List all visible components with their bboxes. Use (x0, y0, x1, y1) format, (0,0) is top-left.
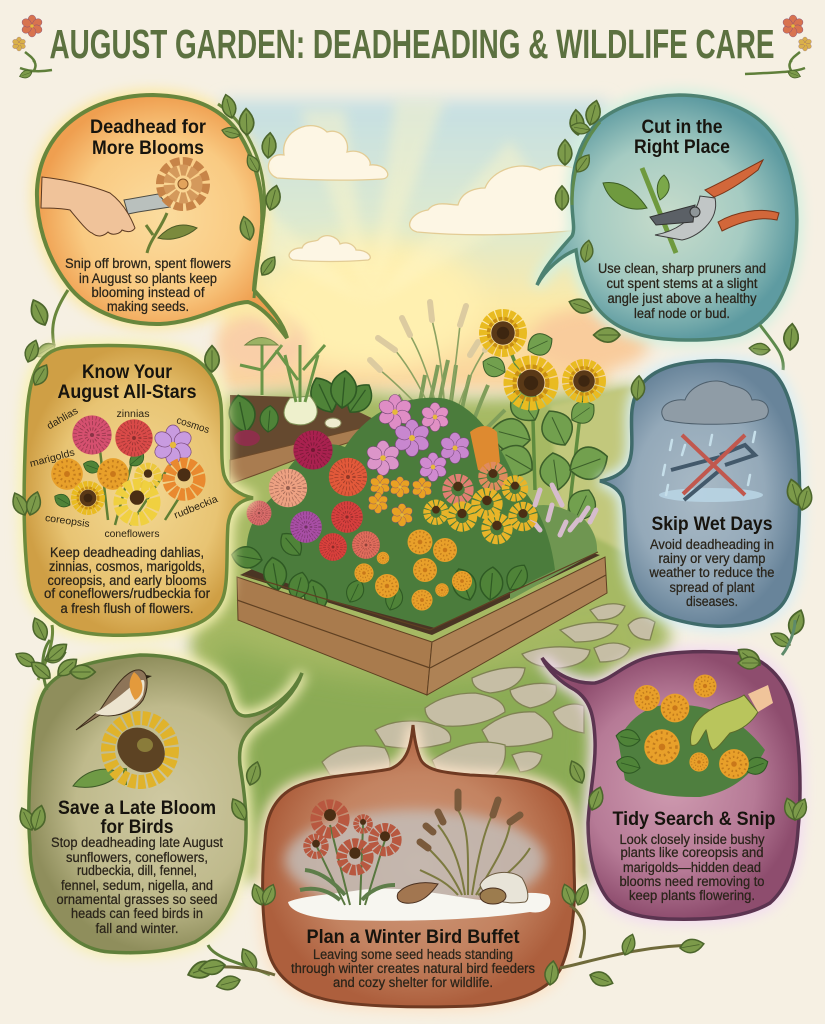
dahlias (269, 430, 367, 507)
vine leaves (198, 882, 705, 993)
panel: Tidy Search & Snip: plants like coreopsis and (620, 845, 764, 860)
meadow lower shade (215, 640, 600, 840)
flower labels: zinnias (116, 409, 150, 420)
heading: Plan a Winter Bird Buffet (306, 927, 520, 948)
body text: Avoid deadheading in (650, 537, 774, 552)
panel: Know Your August All-Stars: a fresh flush of flowers. (60, 601, 194, 616)
panel: Cut in the Right Place: leaf node or bud. (634, 306, 730, 321)
back vegetable bed (226, 338, 382, 484)
panel: Cut in the Right Place: angle just above a healthy (608, 291, 757, 306)
heading: Know Your (82, 362, 173, 383)
icon: pruners cutting stem (603, 160, 779, 253)
meadow (190, 385, 670, 880)
icon: bird on sunflower (73, 670, 174, 787)
icon: gloved hand over marigolds (614, 674, 773, 797)
heading: Cut in the (642, 117, 722, 138)
coneflower leaves (300, 870, 395, 900)
vines (200, 905, 700, 975)
vine (572, 122, 783, 370)
cloud right (410, 165, 580, 235)
panel: Skip Wet Days: weather to reduce the (649, 565, 774, 580)
panel: Deadhead for More Blooms: in August so plants keep (79, 271, 217, 286)
right wooden face (427, 557, 607, 695)
bubble (24, 346, 253, 635)
flower labels: cosmos (175, 415, 211, 436)
panel: Save a Late Bloom for Birds: ornamental grasses so seed (56, 892, 218, 907)
grass stems (380, 320, 485, 433)
lavender foliage (510, 505, 597, 600)
sun rays (220, 100, 550, 305)
coneflowers (316, 805, 344, 833)
winter sky (285, 810, 545, 910)
body text: Keep deadheading dahlias, (50, 545, 204, 560)
pruners (124, 194, 170, 214)
panel: Know Your August All-Stars: zinnias, cosmos, marigolds, (49, 559, 205, 574)
vine leaves (566, 644, 810, 823)
flower labels: coreopsis (44, 513, 90, 530)
coneflower stems (316, 825, 385, 905)
soil (240, 500, 600, 635)
raised garden bed (230, 394, 607, 695)
flower bouquet (51, 415, 199, 525)
bubble (537, 95, 797, 340)
bubble (29, 655, 302, 953)
halo (600, 361, 800, 626)
panel: Cut in the Right Place: cut spent stems at a slight (606, 276, 758, 291)
coreopsis (367, 474, 433, 526)
ornamental grass (370, 302, 505, 445)
left wooden face (237, 577, 432, 695)
snowy grass (420, 810, 530, 895)
vine (43, 640, 270, 975)
vine leaves (555, 99, 799, 356)
panel: Skip Wet Days (600, 361, 815, 650)
panel: Deadhead for More Blooms: blooming instead of (92, 285, 205, 300)
vine (38, 625, 53, 680)
flower labels: rudbeckia (173, 494, 220, 521)
hedgehog (480, 888, 506, 904)
marigolds (354, 530, 472, 611)
body text: Leaving some seed heads standing (313, 947, 513, 962)
panel: Cut in the Right Place: Right Place (634, 137, 730, 158)
illustration: sky, sunrise and meadow (190, 100, 670, 880)
dill umbel (245, 338, 278, 345)
soil (230, 395, 382, 462)
halo (537, 95, 797, 340)
halo (29, 655, 302, 953)
ground bird (397, 883, 438, 903)
peach horizon right (530, 308, 650, 372)
hedgehog shelter (480, 872, 528, 903)
icon: winter scene with snow, coneflowers, grass, bird, hedgehog (285, 792, 550, 921)
fennel fronds (240, 345, 325, 402)
flower labels: coneflowers (104, 529, 160, 540)
heading: Deadhead for (90, 117, 207, 138)
plank lines (237, 552, 606, 668)
sky wash (222, 100, 607, 390)
halo (263, 725, 574, 1007)
panel: Save a Late Bloom for Birds: rudbeckia, dill, fennel, (77, 863, 197, 878)
panel: Deadhead for More Blooms (27, 93, 287, 361)
bubble (263, 725, 574, 1007)
heading: Save a Late Bloom (58, 798, 216, 819)
seed plumes (370, 302, 495, 370)
panel: Save a Late Bloom for Birds (16, 639, 302, 982)
cloud small (289, 236, 370, 262)
vine leaves (9, 338, 219, 670)
panel: Tidy Search & Snip (542, 620, 810, 919)
panel: Plan a Winter Bird Buffet: and cozy shelter for wildlife. (333, 975, 493, 990)
flower labels: marigolds (29, 447, 76, 470)
vine (53, 104, 265, 345)
panel: Know Your August All-Stars (9, 338, 253, 680)
panel: Skip Wet Days: diseases. (686, 594, 738, 609)
wooden front (230, 423, 382, 484)
bubble (542, 652, 800, 919)
bubble (600, 361, 800, 626)
heading: Tidy Search & Snip (612, 809, 776, 830)
clouds (268, 126, 580, 262)
lavender spires (532, 485, 596, 535)
hand (41, 177, 135, 236)
sunflower leaves (488, 414, 534, 456)
panel: Save a Late Bloom for Birds: for Birds (100, 817, 174, 838)
stepping stone path (322, 604, 655, 778)
cloud left (268, 126, 388, 180)
icon: rain cloud over crossed-out pruners (659, 381, 768, 502)
halo (24, 346, 253, 635)
foliage leaves (230, 528, 533, 615)
stems (510, 350, 584, 520)
stem into panel (782, 620, 795, 655)
panel: Cut in the Right Place (537, 95, 799, 370)
grass blades (398, 360, 505, 445)
panel: Save a Late Bloom for Birds: fall and winter. (96, 921, 178, 936)
vine leaves (16, 639, 264, 982)
orange blossom cluster (470, 426, 500, 470)
flower (160, 161, 206, 207)
panel: Know Your August All-Stars: August All-Stars (58, 382, 196, 403)
panel: Know Your August All-Stars: coreopsis, and early blooms (48, 573, 207, 588)
beet (234, 430, 260, 446)
wrist (748, 685, 773, 712)
panel: Save a Late Bloom for Birds: sunflowers, coneflowers, (66, 850, 208, 865)
panel: Tidy Search & Snip: blooms need removing to (620, 874, 764, 889)
fennel bulb (284, 396, 317, 425)
halo (37, 95, 287, 338)
stem and leaf (146, 213, 167, 253)
panel: Deadhead for More Blooms: making seeds. (107, 299, 189, 314)
icon: hand with pruners on flower (41, 161, 206, 253)
halo (542, 652, 800, 919)
white turnip (325, 418, 341, 428)
cosmos (365, 394, 471, 482)
heading: Skip Wet Days (652, 514, 772, 535)
ornament: left title flowers (12, 15, 52, 80)
foliage mass (246, 398, 555, 628)
sun glow (262, 240, 482, 370)
rudbeckia and coneflowers (427, 466, 534, 540)
right field (550, 385, 640, 560)
panel: Know Your August All-Stars: of coneflowers/rudbeckia for (44, 586, 210, 601)
body text: Snip off brown, spent flowers (65, 256, 231, 271)
panel: Tidy Search & Snip: marigolds—hidden dead (623, 860, 761, 875)
peach horizon left (217, 315, 307, 375)
leafy veg (226, 370, 378, 435)
panel: Tidy Search & Snip: keep plants flowering. (629, 888, 755, 903)
snow ground (288, 889, 550, 921)
panel: Skip Wet Days: rainy or very damp (658, 551, 766, 566)
zinnias (247, 501, 380, 561)
body text: Use clean, sharp pruners and (598, 261, 766, 276)
flower labels (29, 406, 220, 540)
vine leaves (630, 375, 815, 650)
glove (691, 695, 758, 750)
vine leaves (27, 93, 283, 361)
bubble (37, 95, 287, 338)
panel: Plan a Winter Bird Buffet: through winter creates natural bird feeders (291, 961, 535, 976)
panel: Deadhead for More Blooms: More Blooms (92, 138, 204, 159)
ornament: right title flowers (745, 15, 812, 80)
panel: Plan a Winter Bird Buffet (198, 725, 705, 1007)
foliage (618, 704, 765, 797)
flower labels: dahlias (45, 406, 80, 432)
body text: Look closely inside bushy (620, 832, 765, 847)
panel: Skip Wet Days: spread of plant (670, 580, 755, 595)
sunflowers (479, 315, 613, 526)
body text: Stop deadheading late August (51, 835, 223, 850)
panel: Save a Late Bloom for Birds: fennel, sedum, nigella, and (61, 878, 213, 893)
panel: Save a Late Bloom for Birds: heads can feed birds in (71, 906, 203, 921)
seed heads (420, 792, 520, 848)
